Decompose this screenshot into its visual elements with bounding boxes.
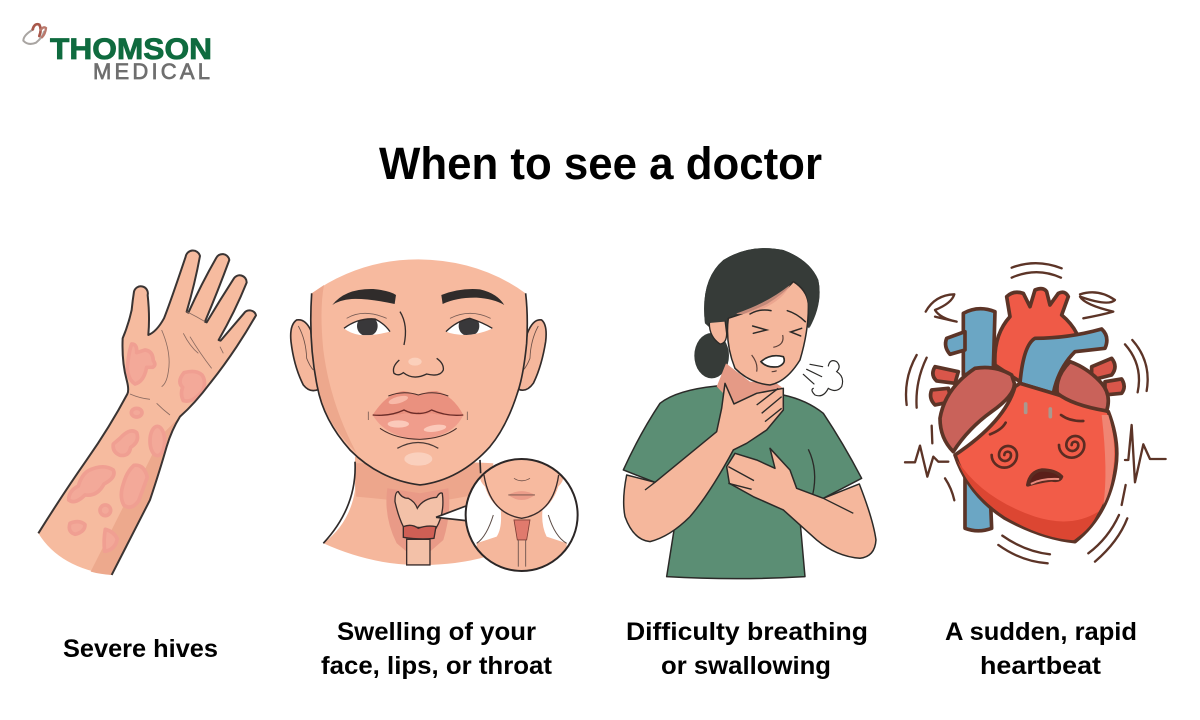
illustration: dizzy racing heart bbox=[905, 263, 1166, 563]
eyebrows bbox=[332, 289, 396, 305]
left arm and throat hand bbox=[624, 383, 783, 542]
arm bbox=[38, 251, 256, 575]
hair bun bbox=[694, 333, 729, 378]
hair front bbox=[704, 248, 820, 328]
brows and closed eyes bbox=[750, 310, 805, 336]
heart face bbox=[990, 415, 1084, 468]
throat fingers bbox=[645, 388, 782, 490]
eyes bbox=[344, 313, 492, 336]
left atrium bbox=[940, 367, 1014, 452]
illustration: arm with hives bbox=[38, 251, 256, 575]
arm shadow bbox=[91, 417, 180, 575]
label: breathing: Difficulty breathing bbox=[626, 618, 868, 646]
label: heartbeat: A sudden, rapid bbox=[945, 618, 1137, 646]
right arm and chest hand bbox=[727, 448, 876, 558]
logo subtitle: MEDICAL bbox=[93, 59, 210, 84]
label: breathing: or swallowing bbox=[661, 652, 831, 680]
neck bbox=[717, 363, 783, 404]
small vessels bbox=[931, 358, 1124, 405]
head bbox=[311, 259, 527, 485]
right highlight bbox=[1102, 415, 1114, 505]
heart bottom shade bbox=[957, 460, 1098, 540]
neck bbox=[323, 457, 493, 565]
callout pointer bbox=[436, 505, 470, 521]
right atrium bbox=[1057, 362, 1108, 411]
label: severe hives: Severe hives bbox=[63, 635, 218, 663]
label: heartbeat bbox=[945, 618, 1137, 680]
face bbox=[727, 282, 808, 385]
nose bbox=[393, 312, 443, 377]
jaw outline bbox=[311, 293, 527, 485]
label: swelling: Swelling of your bbox=[337, 618, 536, 646]
ears bbox=[291, 320, 546, 391]
chin bbox=[397, 442, 438, 448]
shirt fold bbox=[808, 449, 815, 495]
swollen lips bbox=[368, 391, 467, 439]
ear bbox=[709, 318, 727, 344]
breath puff bbox=[803, 361, 843, 396]
chest fingers bbox=[728, 467, 853, 513]
hives bbox=[69, 344, 204, 551]
inset circle: throat close-up bbox=[466, 450, 578, 572]
neck outline bbox=[323, 460, 481, 543]
logo wordmark: THOMSON bbox=[50, 33, 212, 66]
hair back bbox=[704, 248, 820, 340]
aorta bbox=[995, 289, 1077, 382]
forehead blush bbox=[737, 285, 790, 314]
pulmonary artery bbox=[1020, 329, 1107, 393]
sweat drops bbox=[1026, 404, 1050, 417]
title: When to see a doctor bbox=[379, 138, 822, 189]
shirt bbox=[623, 386, 862, 579]
palm creases bbox=[130, 312, 223, 415]
motion lines and pulse traces bbox=[905, 263, 1166, 563]
throat cartilage bbox=[386, 488, 449, 565]
vena cava bbox=[946, 309, 995, 531]
icon: heart ribbon bbox=[23, 24, 46, 44]
label: heartbeat: heartbeat bbox=[980, 652, 1102, 680]
arm outline bbox=[38, 251, 256, 575]
logo: Thomson Medical bbox=[23, 24, 212, 84]
worried mouth bbox=[1028, 470, 1062, 485]
label: swelling bbox=[321, 618, 553, 680]
nose and cheek lines bbox=[752, 335, 783, 372]
heart body bbox=[955, 383, 1117, 542]
illustration: woman struggling to breathe bbox=[623, 248, 876, 579]
label: breathing bbox=[626, 618, 868, 680]
illustration: swollen face and throat bbox=[291, 259, 578, 572]
label: swelling: face, lips, or throat bbox=[321, 652, 553, 680]
open mouth bbox=[761, 356, 784, 367]
